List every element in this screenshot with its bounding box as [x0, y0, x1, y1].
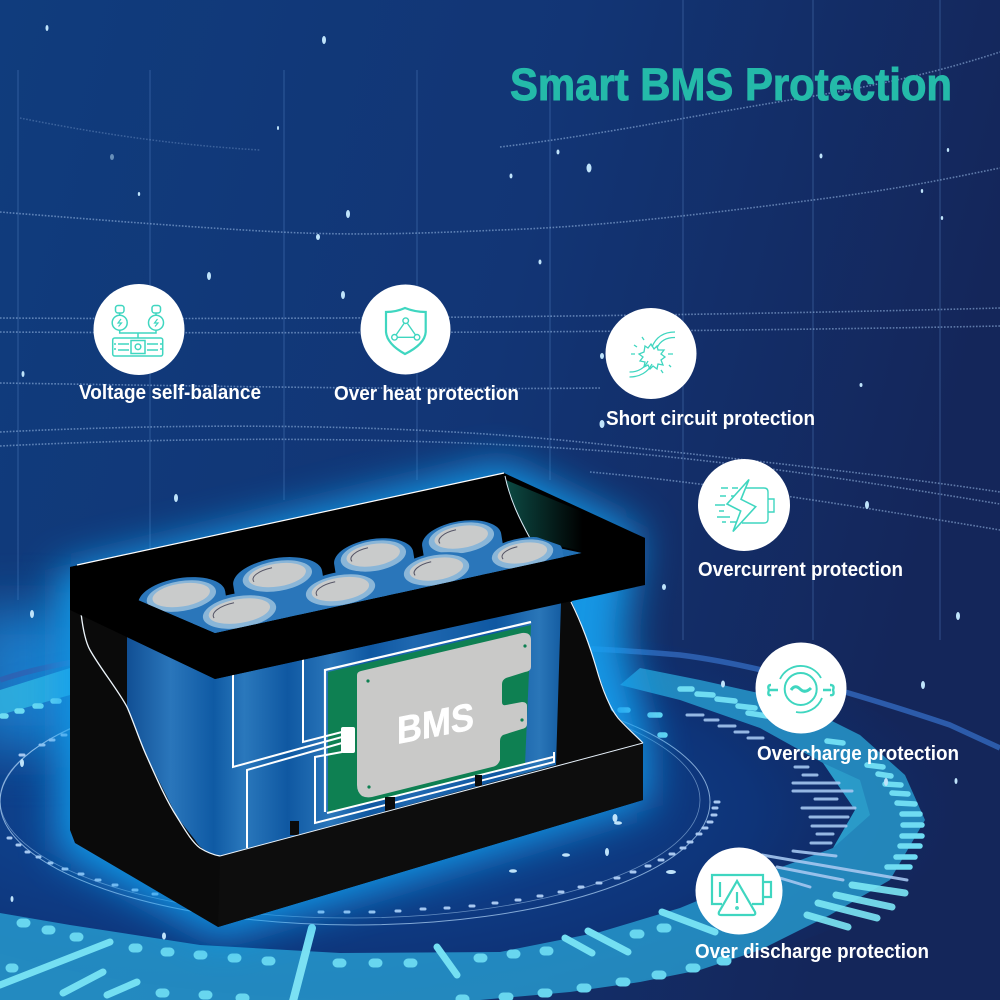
left side floor glow	[0, 610, 80, 750]
label: Short circuit protection	[606, 408, 815, 430]
label: Voltage self-balance	[79, 382, 261, 404]
bottom capsule ticks	[10, 923, 727, 999]
cell: back row	[422, 520, 507, 586]
icon: overcharge coil	[756, 642, 846, 734]
top frame	[70, 473, 645, 679]
box rear and side walls	[70, 473, 643, 927]
BMS circuit board	[325, 622, 531, 812]
icon: battery bolt	[698, 459, 790, 551]
icon: short circuit	[606, 308, 696, 399]
battery tops seen through opening	[138, 520, 582, 633]
inner dotted ring	[8, 735, 719, 912]
battery cell bodies	[127, 603, 561, 856]
thin inner rings	[0, 679, 710, 925]
black terminals	[290, 775, 482, 835]
feature: over discharge protection	[695, 848, 929, 963]
icon: low battery warning	[696, 848, 782, 934]
background grid and dotted arcs	[0, 0, 1000, 640]
icon: voltage balance	[94, 284, 184, 375]
large upper arc	[0, 644, 1000, 748]
curved white edge of left wall	[81, 613, 220, 856]
feature: overcurrent protection	[698, 459, 903, 581]
label: Over heat protection	[334, 383, 519, 405]
icon: shield	[360, 284, 450, 374]
front lower tray	[218, 743, 643, 927]
BMS label: BMS	[397, 694, 474, 752]
connector tab	[341, 727, 355, 753]
teal polygon band	[0, 668, 925, 1000]
white wiring traces	[233, 563, 554, 848]
feature: voltage self-balance	[79, 284, 261, 404]
feature: over heat protection	[334, 284, 519, 405]
title: Smart BMS Protection	[510, 60, 952, 110]
cell: front row	[487, 537, 564, 574]
feature: short circuit protection	[606, 308, 815, 430]
BMS silver cover	[357, 633, 531, 797]
label: Overcurrent protection	[698, 559, 903, 581]
floor radar rings	[0, 610, 1000, 1000]
outer cyan ticks	[2, 689, 922, 867]
battery pack illustration	[70, 473, 645, 927]
feature: overcharge protection	[756, 642, 959, 765]
right wall curved edge	[571, 602, 643, 743]
right inner stripes	[687, 715, 907, 887]
label: Over discharge protection	[695, 941, 929, 963]
battery box glow	[58, 462, 650, 938]
rear inner panel	[506, 480, 645, 555]
label: Overcharge protection	[757, 743, 959, 765]
